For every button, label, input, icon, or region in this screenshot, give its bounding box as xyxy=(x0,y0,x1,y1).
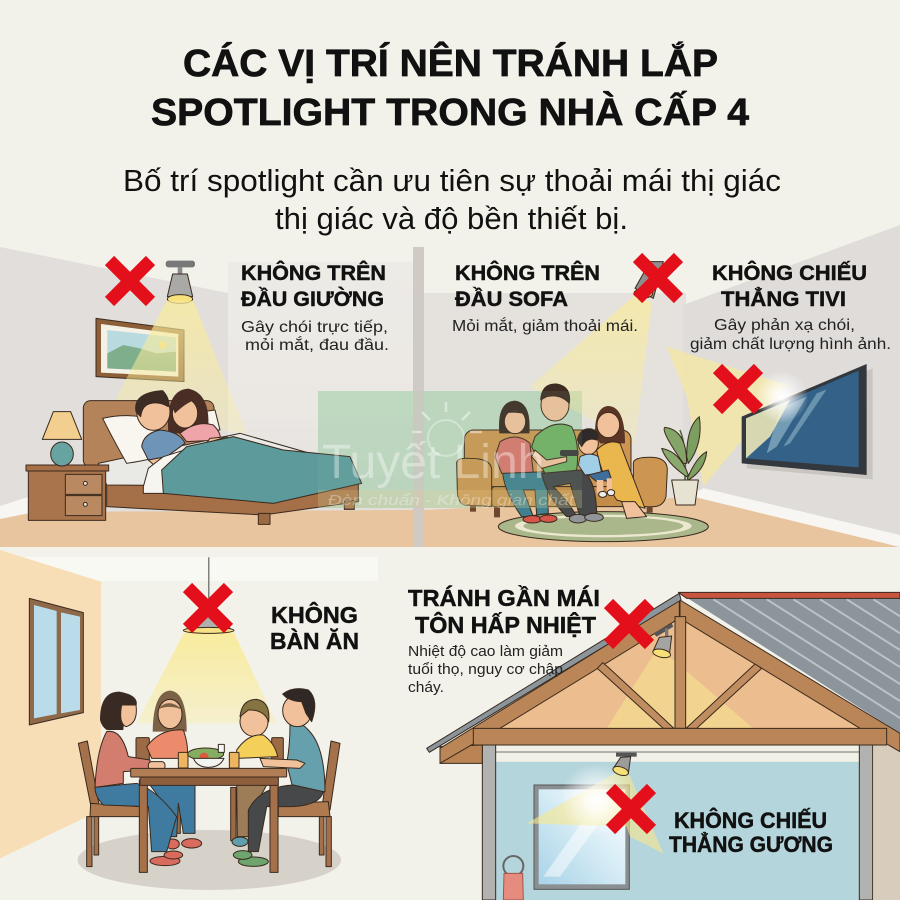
mother on sofa xyxy=(595,406,647,518)
living wall xyxy=(424,293,686,513)
mirror xyxy=(534,785,629,889)
label: bed: mỏi mắt, đau đầu. xyxy=(245,335,389,354)
title xyxy=(151,41,749,134)
food and drinks xyxy=(178,744,239,768)
sofa beam xyxy=(530,295,652,443)
tv xyxy=(742,364,873,479)
left chair xyxy=(78,741,140,867)
ceiling strip xyxy=(496,745,859,762)
bathroom spotlight xyxy=(612,753,637,777)
man in bed xyxy=(136,391,193,473)
label: tv xyxy=(690,261,891,353)
label: roof: TÔN HẤP NHIỆT xyxy=(415,611,596,638)
red x: tv xyxy=(718,368,758,410)
girl on sofa xyxy=(495,401,557,523)
man at table xyxy=(233,689,325,866)
back chairs xyxy=(136,738,283,841)
label: sofa xyxy=(452,261,638,335)
label: dining: KHÔNG xyxy=(271,601,358,628)
mirror beam xyxy=(527,773,663,853)
sofa xyxy=(457,430,667,517)
dining table xyxy=(131,768,287,872)
panel: dining room xyxy=(0,550,378,890)
picture frame xyxy=(96,318,184,382)
divider between rooms xyxy=(413,247,424,547)
mattress xyxy=(98,433,333,487)
ceiling band xyxy=(0,557,378,581)
rug xyxy=(498,512,708,542)
bed frame xyxy=(107,483,358,515)
label: dining xyxy=(270,601,359,654)
red x: dining xyxy=(188,588,228,628)
label: sofa: ĐẦU SOFA xyxy=(455,288,568,311)
bedroom floor xyxy=(0,505,413,547)
side wall xyxy=(683,225,900,547)
label: bed: KHÔNG TRÊN xyxy=(241,261,386,285)
title: CÁC VỊ TRÍ NÊN TRÁNH LẮP xyxy=(183,41,718,85)
label: tv: giảm chất lượng hình ảnh. xyxy=(690,336,891,353)
red x: sofa xyxy=(638,258,678,298)
blanket xyxy=(162,437,362,503)
tv beam xyxy=(667,347,787,487)
father on sofa xyxy=(532,384,603,523)
label: tv: Gây phản xạ chói, xyxy=(714,317,855,334)
label: dining: BÀN ĂN xyxy=(270,627,359,654)
plant xyxy=(662,417,707,505)
label: roof: tuổi thọ, nguy cơ chập xyxy=(408,661,563,678)
boy on sofa xyxy=(577,429,615,497)
boy at table xyxy=(232,699,278,846)
label: roof: TRÁNH GẦN MÁI xyxy=(408,584,600,611)
right chair xyxy=(278,741,340,867)
watermark xyxy=(318,391,582,509)
red x: mirror xyxy=(610,788,652,830)
label: roof: cháy. xyxy=(408,679,444,696)
label: bed: ĐẦU GIƯỜNG xyxy=(241,287,384,311)
floor shadow xyxy=(78,830,341,890)
watermark: Đèn chuẩn - Không gian chất xyxy=(328,492,575,509)
attic interior xyxy=(500,617,860,728)
woman in bed xyxy=(168,389,227,452)
attic spotlight xyxy=(652,623,673,659)
left roof edge xyxy=(427,593,681,752)
towel ring xyxy=(503,856,523,900)
window xyxy=(29,598,83,725)
lamp beam xyxy=(137,633,277,723)
label: bed: Gây chói trực tiếp, xyxy=(241,319,388,336)
ceiling spotlight xyxy=(634,262,663,298)
label: mirror: THẲNG GƯƠNG xyxy=(669,832,833,857)
metal roof xyxy=(678,592,900,733)
subtitle: thị giác và độ bền thiết bị. xyxy=(275,201,628,236)
table lamp xyxy=(42,412,82,466)
light beam xyxy=(107,301,247,433)
subtitle: Bố trí spotlight cần ưu tiên sự thoải mái thị giác xyxy=(123,163,781,198)
red x: bed xyxy=(110,260,150,302)
white sheet xyxy=(143,437,233,493)
label: roof xyxy=(408,584,600,696)
teal wall xyxy=(496,762,859,900)
text backdrop xyxy=(228,262,413,512)
red x: roof xyxy=(608,604,650,644)
truss xyxy=(440,600,900,763)
attic beam light xyxy=(607,655,753,728)
panel: bedroom xyxy=(0,247,413,547)
watermark base left xyxy=(318,391,413,508)
woman at table xyxy=(95,692,183,866)
pillows xyxy=(103,416,160,463)
panel: roof and bathroom xyxy=(427,592,900,900)
side wall xyxy=(0,550,101,858)
living floor xyxy=(424,497,900,547)
subtitle xyxy=(123,163,781,236)
wall columns xyxy=(482,745,900,900)
label: roof: Nhiệt độ cao làm giảm xyxy=(408,643,563,660)
girl at table xyxy=(147,691,202,849)
label: tv: KHÔNG CHIẾU xyxy=(712,261,867,285)
pendant lamp xyxy=(183,557,234,633)
label: bed xyxy=(241,261,389,354)
label: mirror xyxy=(669,808,833,857)
label: mirror: KHÔNG CHIẾU xyxy=(674,808,827,833)
eave underside xyxy=(440,745,482,763)
label: sofa: Mỏi mắt, giảm thoải mái. xyxy=(452,316,638,335)
label: tv: THẲNG TIVI xyxy=(721,288,846,311)
bedroom wall xyxy=(0,247,413,515)
nightstand xyxy=(26,465,109,520)
title: SPOTLIGHT TRONG NHÀ CẤP 4 xyxy=(151,90,749,134)
panel: living room xyxy=(424,225,900,547)
watermark: Tuyết Linh xyxy=(322,436,544,489)
bed headboard xyxy=(83,401,214,467)
label: sofa: KHÔNG TRÊN xyxy=(455,261,600,285)
watermark base right xyxy=(424,391,582,508)
spotlight fixture xyxy=(166,261,195,303)
